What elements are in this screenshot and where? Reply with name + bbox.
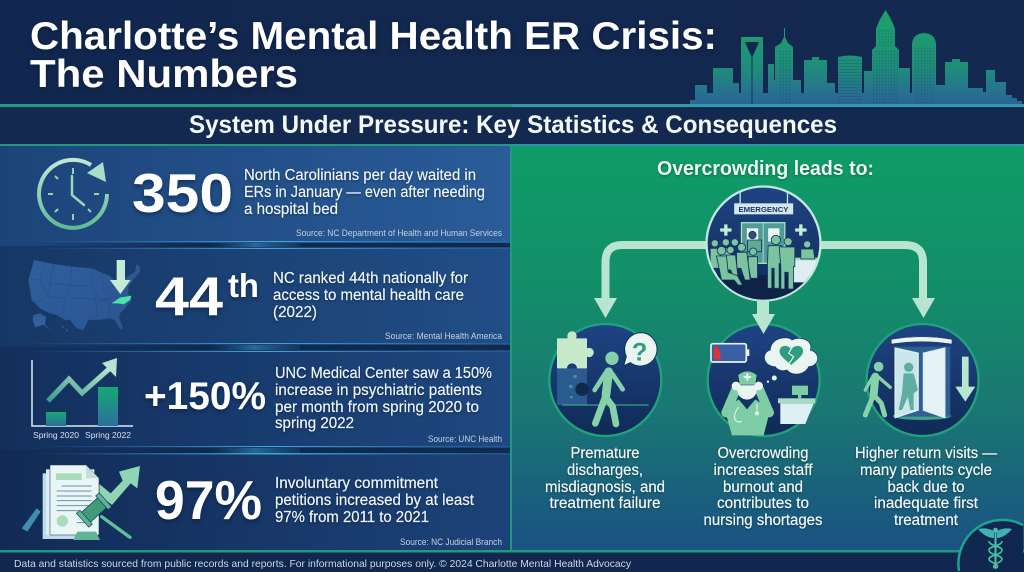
description: increase in psychiatric patients <box>275 382 482 399</box>
source: Source: NC Judicial Branch <box>400 537 502 548</box>
stat: 44th <box>155 265 259 327</box>
icon: US map with arrow <box>28 260 140 332</box>
subtitle bar: System Under Pressure: Key Statistics & Consequences <box>189 111 837 139</box>
row 3: +150% <box>0 347 511 450</box>
caption: misdiagnosis, and <box>545 479 665 496</box>
title <box>30 15 717 96</box>
header band <box>0 0 1024 104</box>
description: petitions increased by at least <box>275 492 475 509</box>
icon: bar chart with trend arrow <box>32 358 133 440</box>
description: Involuntary commitment <box>275 475 439 492</box>
caption <box>855 445 997 529</box>
caption: contributes to <box>717 495 809 512</box>
consequence 3: return visits <box>855 324 997 529</box>
panel: key statistics <box>0 146 511 550</box>
consequence 1: premature discharge <box>545 324 665 512</box>
source: Source: Mental Health America <box>385 331 503 342</box>
icon: Charlotte skyline <box>690 10 1022 104</box>
caption: back due to <box>888 479 964 496</box>
caption: increases staff <box>714 462 813 479</box>
caption: inadequate first <box>874 495 979 512</box>
description: per month from spring 2020 to <box>275 399 479 416</box>
description: spring 2022 <box>275 415 354 432</box>
icon: clock with arrow <box>39 160 107 228</box>
description <box>244 167 485 218</box>
row 4: 97% <box>0 450 511 550</box>
description: NC ranked 44th nationally for <box>273 270 468 287</box>
caption: nursing shortages <box>704 512 823 529</box>
footer <box>0 550 1024 572</box>
icon: burned-out nurse <box>708 324 820 436</box>
description: North Carolinians per day waited in <box>244 167 476 184</box>
panel: overcrowding consequences <box>510 146 1024 550</box>
description: UNC Medical Center saw a 150% <box>275 365 492 382</box>
heading: Overcrowding leads to: <box>657 158 874 180</box>
icon: bar chart with trend arrow: Spring 2022 <box>85 430 131 440</box>
caption <box>704 445 823 529</box>
icon: person walking with puzzle and question <box>549 324 661 436</box>
description: access to mental health care <box>273 287 464 304</box>
description: ERs in January — even after needing <box>244 184 485 201</box>
icon: document, gavel and arrow <box>22 465 140 540</box>
caption: Overcrowding <box>718 445 808 462</box>
row 1: 350 per day <box>0 146 511 246</box>
icon: emergency room scene <box>704 186 820 302</box>
row dividers <box>20 241 511 454</box>
source: Source: UNC Health <box>428 434 502 445</box>
description <box>275 475 475 526</box>
source: Source: NC Department of Health and Human Services <box>296 228 502 239</box>
caption: many patients cycle <box>860 462 992 479</box>
description <box>273 270 468 321</box>
caption: discharges, <box>567 462 643 479</box>
subtitle bar <box>0 104 1024 146</box>
icon: bar chart with trend arrow: Spring 2020 <box>33 430 79 440</box>
caption: burnout and <box>723 479 803 496</box>
consequence 2: staff burnout <box>704 324 823 529</box>
icon: emergency room scene: EMERGENCY <box>738 207 789 214</box>
row 2: 44th ranking <box>0 246 511 347</box>
arrow: centre down arrow <box>752 300 775 334</box>
caption <box>545 445 665 512</box>
icon: caduceus badge <box>958 520 1023 571</box>
description <box>275 365 492 432</box>
caption: Premature <box>570 445 640 462</box>
stat: 350: 350 <box>132 162 233 224</box>
stat: 97%: 97% <box>155 469 262 531</box>
arrows: branching flow <box>594 245 935 318</box>
icon: person walking with puzzle and question: ? <box>632 339 647 367</box>
title: Charlotte’s Mental Health ER Crisis: <box>30 15 717 58</box>
description: 97% from 2011 to 2021 <box>275 509 429 526</box>
stat: 44th: 44 <box>155 265 223 327</box>
description: (2022) <box>273 304 317 321</box>
footer: Data and statistics sourced from public records and reports. For informational purposes only. © 2024 Charlotte Mental Health Advocacy <box>14 558 632 570</box>
caption: Higher return visits — <box>855 445 997 462</box>
stat: +150%: +150% <box>144 375 266 418</box>
caption: treatment failure <box>550 495 660 512</box>
stat: 44th: th <box>228 267 259 304</box>
icon: revolving door <box>865 324 979 436</box>
description: a hospital bed <box>244 201 338 218</box>
title: The Numbers <box>30 53 298 96</box>
caption: treatment <box>894 512 959 529</box>
